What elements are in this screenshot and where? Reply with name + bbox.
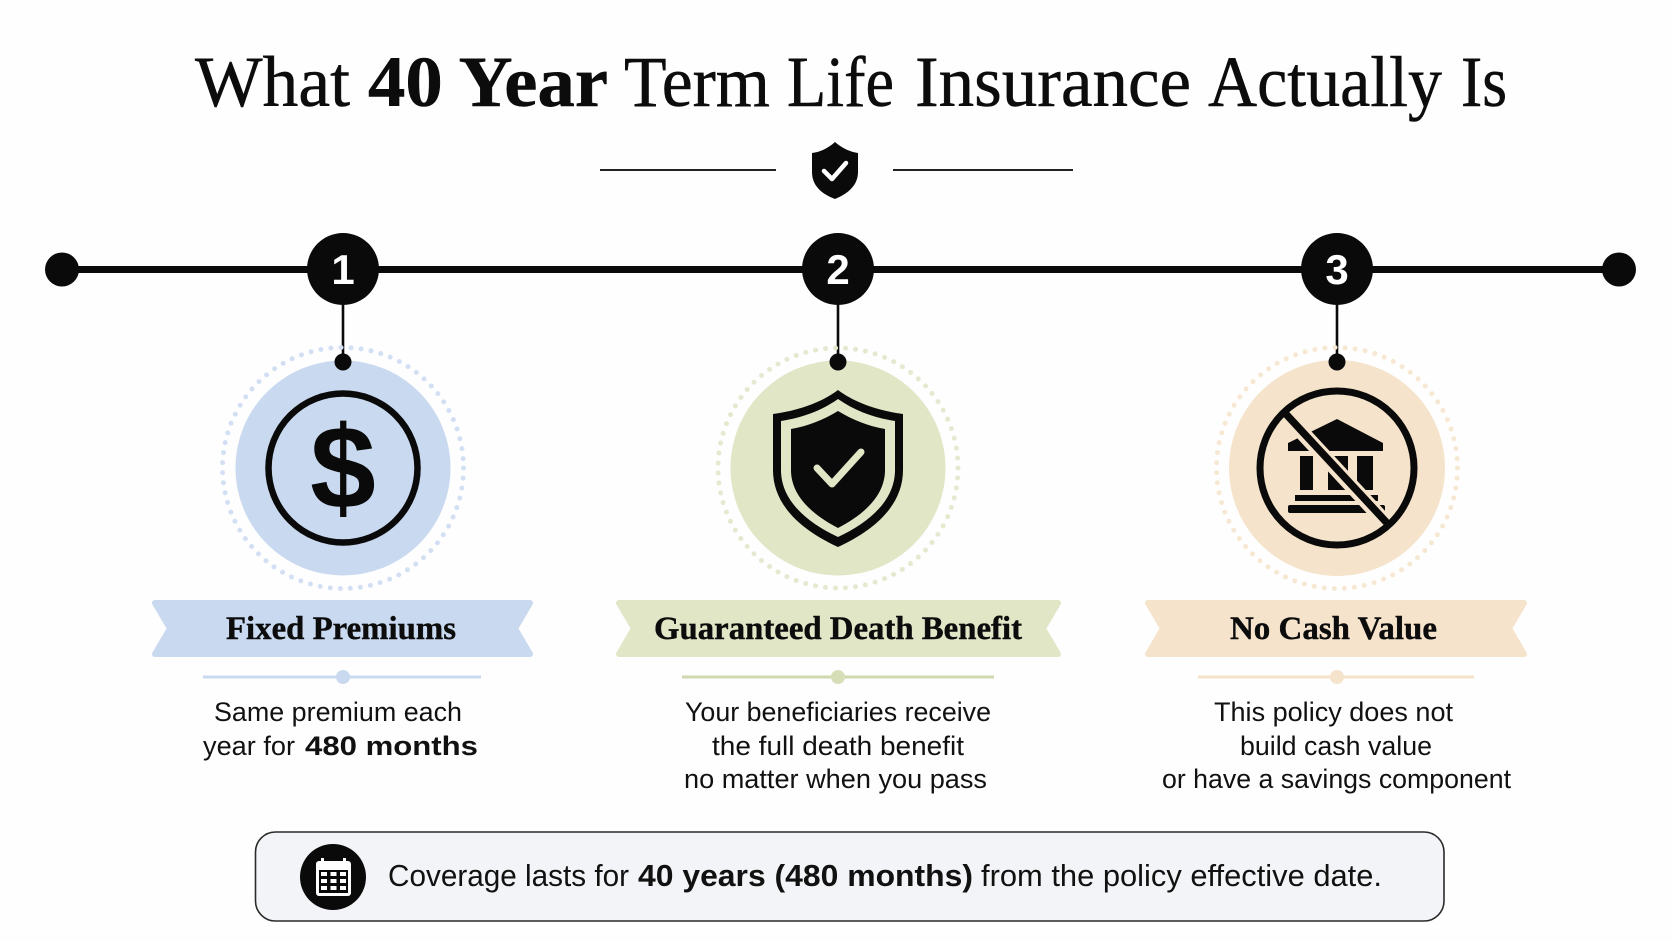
ribbon heading: no cash value: No Cash Value <box>1230 611 1437 647</box>
title: 40 Year <box>368 42 608 122</box>
callout text <box>388 858 1382 893</box>
ribbon heading: fixed premiums <box>155 603 530 654</box>
title: Actually <box>1208 42 1442 122</box>
step marker 2: 2 <box>826 246 850 293</box>
icon: shield with check <box>718 348 958 588</box>
description: the full death benefit <box>712 731 965 761</box>
title: What <box>195 42 350 122</box>
icon: dollar coin <box>222 348 464 588</box>
divider <box>682 670 994 684</box>
ribbon heading: no cash value <box>1148 603 1524 654</box>
ribbon heading: guaranteed death benefit: Guaranteed Death Benefit <box>654 611 1022 647</box>
description: year for <box>203 731 295 761</box>
title: Life <box>787 42 894 122</box>
callout text: 40 years (480 months) <box>638 858 973 893</box>
title <box>195 42 1507 122</box>
description <box>203 697 478 761</box>
panel: guaranteed death benefit <box>619 233 1058 794</box>
panel: no cash value <box>1148 233 1524 794</box>
description: Same premium each <box>214 697 462 727</box>
description <box>1162 697 1511 794</box>
callout: coverage duration <box>256 832 1444 921</box>
step marker 1 <box>307 233 379 362</box>
title: Is <box>1461 42 1507 122</box>
icon: calendar <box>300 844 366 910</box>
ribbon heading: fixed premiums: Fixed Premiums <box>226 611 456 647</box>
ribbon heading: guaranteed death benefit <box>619 603 1058 654</box>
title: Insurance <box>915 42 1191 122</box>
title divider with shield icon <box>600 142 1073 199</box>
step marker 3 <box>1301 233 1373 362</box>
description: 480 months <box>305 731 478 761</box>
description: Your beneficiaries receive <box>685 697 991 727</box>
callout text: Coverage lasts for <box>388 858 629 893</box>
step marker 1: 1 <box>331 246 355 293</box>
panel: fixed premiums <box>155 233 530 761</box>
divider <box>1198 670 1474 684</box>
description: no matter when you pass <box>684 764 987 794</box>
divider <box>203 670 481 684</box>
icon: dollar coin: $ <box>310 402 376 534</box>
timeline <box>45 252 1636 286</box>
callout text: from the policy effective date. <box>981 858 1382 893</box>
description: or have a savings component <box>1162 764 1511 794</box>
title: Term <box>624 42 770 122</box>
description <box>684 697 991 794</box>
icon: crossed-out bank <box>1216 348 1458 588</box>
step marker 3: 3 <box>1325 246 1349 293</box>
step marker 2 <box>802 233 874 362</box>
description: build cash value <box>1240 731 1432 761</box>
description: This policy does not <box>1214 697 1453 727</box>
